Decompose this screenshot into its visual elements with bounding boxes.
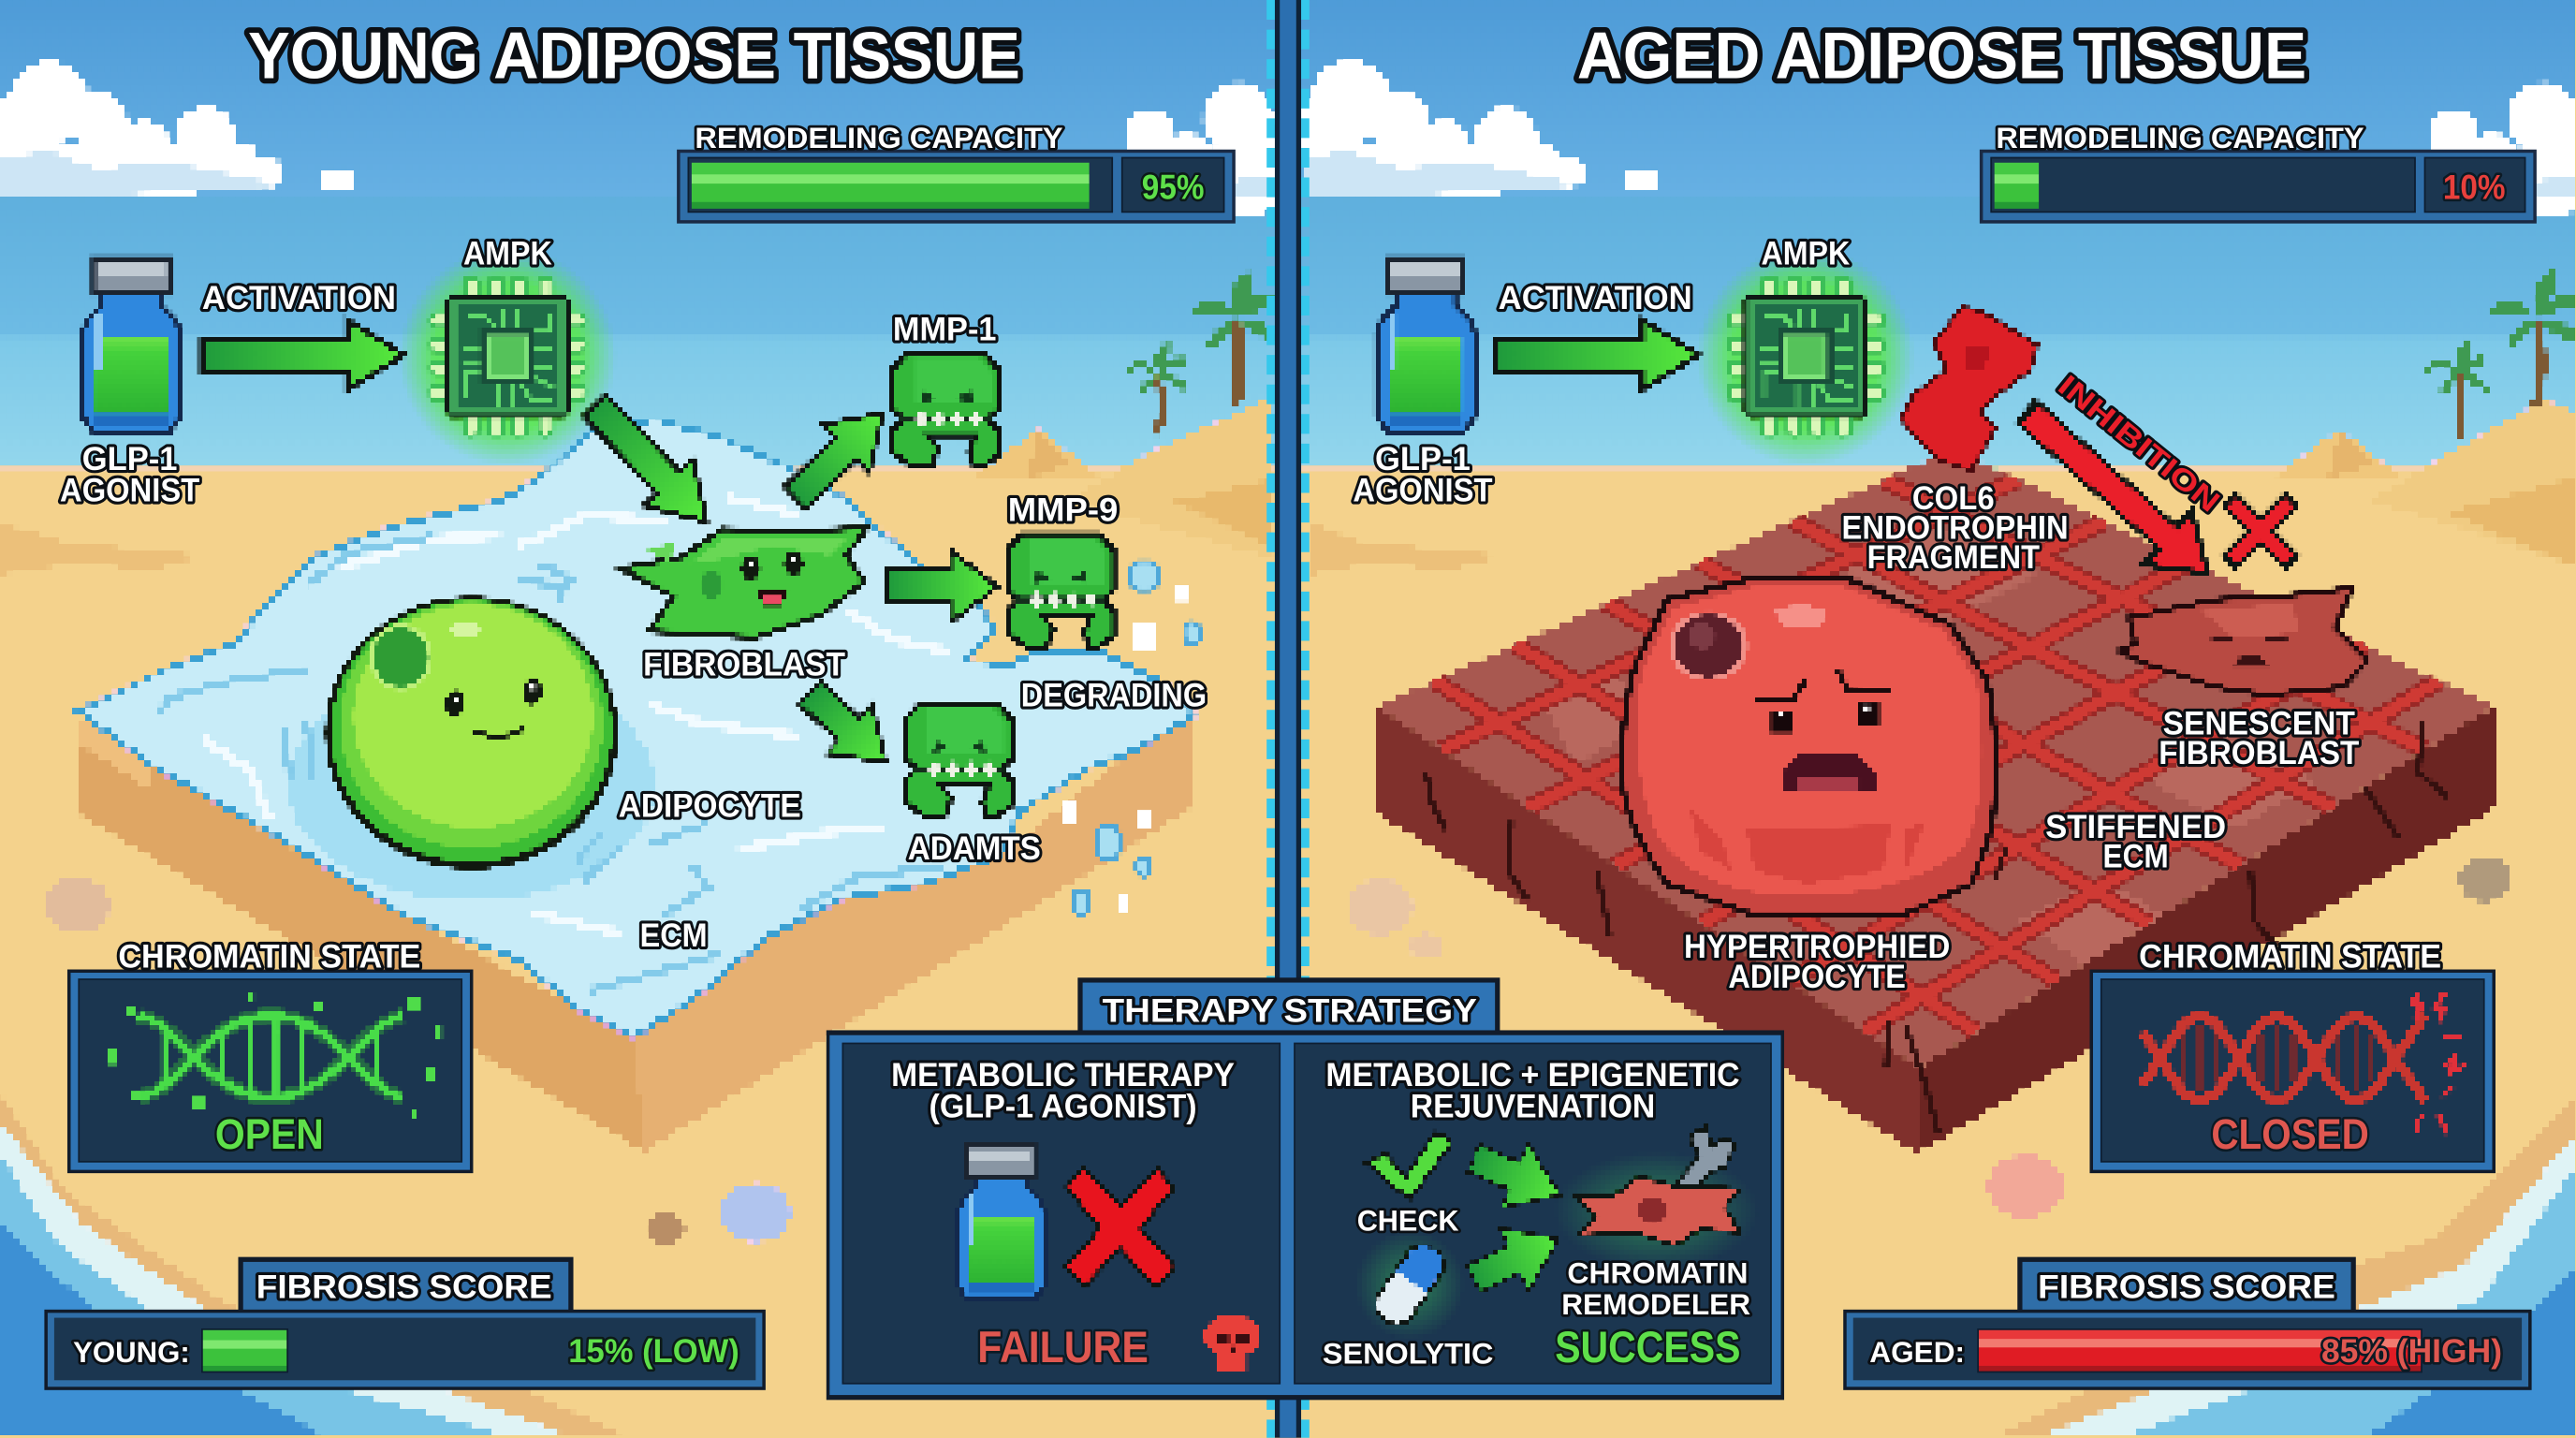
cell: hypertrophied adipocyte (1622, 577, 1996, 914)
label: ECM: ECM (640, 917, 708, 954)
cells, collagen grid, pathway icons and arrows (82, 248, 2448, 1134)
capacity label: REMODELING CAPACITY (695, 121, 1063, 154)
fibrosis tab: FIBROSIS SCORE (2038, 1269, 2335, 1306)
fibrosis label young: YOUNG: (73, 1335, 190, 1369)
label: COL6 endotrophin fragment (1841, 480, 2069, 576)
panel: fibrosis score aged (1843, 1257, 2532, 1390)
arrow: senolytic to remodeler (1459, 1208, 1573, 1310)
icon: check mark (1367, 1132, 1453, 1199)
icon: therapy vial (958, 1145, 1045, 1300)
heading: metabolic therapy: METABOLIC THERAPY (891, 1057, 1235, 1093)
capacity bar fill (1995, 163, 2039, 209)
heading: metabolic plus epigenetic (1325, 1057, 1740, 1124)
shoreline water, bottom right (1996, 1097, 2576, 1438)
icon: open DNA helix (109, 992, 442, 1121)
chromatin label: CHROMATIN STATE (118, 939, 420, 976)
label: senescent fibroblast (2159, 706, 2360, 771)
fibrosis label aged: AGED: (1869, 1335, 1965, 1369)
label: ADAMTS: ADAMTS (908, 830, 1041, 867)
panel: chromatin state open (67, 939, 473, 1173)
central divider (1271, 0, 1305, 1438)
heading: metabolic therapy: (GLP-1 AGONIST) (929, 1088, 1197, 1124)
label: COL6 endotrophin fragment: COL6 (1912, 480, 1995, 517)
fibrosis tab (238, 1257, 574, 1313)
fibrosis tab: FIBROSIS SCORE (256, 1269, 552, 1306)
collagen grid on stiffened ECM (1434, 479, 2439, 1032)
label: chromatin remodeler (1561, 1256, 1750, 1321)
therapy tab heading: THERAPY STRATEGY (1103, 993, 1477, 1030)
label: COL6 endotrophin fragment: ENDOTROPHIN (1841, 510, 2069, 547)
cell: senescent fibroblast (2119, 588, 2367, 695)
capacity value: 95% (1142, 168, 1204, 206)
shoreline water, bottom left (0, 1093, 633, 1438)
icon: senolytic pill (1334, 1210, 1486, 1360)
fibrosis value young: 15% (LOW) (568, 1333, 739, 1370)
panel: chromatin state closed (2089, 939, 2496, 1173)
heading: metabolic therapy (891, 1057, 1235, 1124)
status: success: SUCCESS (1555, 1323, 1741, 1372)
label: senescent fibroblast: SENESCENT (2163, 706, 2355, 742)
label: adipocyte: ADIPOCYTE (619, 787, 801, 824)
inhibition X mark (2224, 494, 2297, 567)
sea (0, 198, 2576, 470)
sky (0, 0, 2576, 198)
young ECM gel surface (79, 419, 1196, 1036)
label: COL6 endotrophin fragment: FRAGMENT (1867, 539, 2040, 576)
fibrosis bar aged (1978, 1329, 2422, 1372)
label: GLP-1 agonist aged (1353, 441, 1493, 508)
chromatin status: open: OPEN (215, 1110, 324, 1158)
label: GLP-1 agonist aged: AGONIST (1353, 472, 1493, 508)
label: hypertrophied adipocyte: HYPERTROPHIED (1684, 929, 1950, 965)
dunes and palms (0, 270, 2576, 575)
icon: chromatin remodeler cell (1554, 1127, 1758, 1270)
panel: remodeling capacity aged (1980, 121, 2537, 224)
label: hypertrophied adipocyte (1684, 929, 1950, 995)
COL6 endotrophin fragment (1901, 307, 2037, 470)
label: MMP-9: MMP-9 (1008, 492, 1118, 528)
chromatin label: CHROMATIN STATE (2139, 939, 2441, 976)
label: GLP-1 agonist young (60, 441, 200, 508)
icon: failure X (1066, 1168, 1175, 1286)
heading: metabolic plus epigenetic: REJUVENATION (1411, 1088, 1655, 1124)
shells and stones (44, 856, 2512, 1245)
label: GLP-1 agonist young: AGONIST (60, 472, 200, 508)
label: stiffened ECM: ECM (2103, 839, 2169, 875)
title: young: YOUNG ADIPOSE TISSUE (248, 18, 1020, 92)
label: stiffened ECM (2045, 809, 2226, 875)
ECM crumbling debris (1063, 562, 1199, 914)
label: senolytic: SENOLYTIC (1323, 1337, 1493, 1371)
cell: fibroblast, young (621, 527, 868, 638)
label: degrading: DEGRADING (1021, 678, 1207, 714)
stiffened ECM surface (1377, 448, 2494, 1068)
label: MMP-1: MMP-1 (893, 311, 996, 347)
fibrosis value aged: 85% (HIGH) (2321, 1333, 2502, 1370)
cell: adipocyte, young (326, 596, 618, 869)
aged tissue block sides (1377, 707, 2494, 1153)
label: senescent fibroblast: FIBROBLAST (2159, 735, 2360, 771)
fibrosis bar young (202, 1329, 287, 1372)
label: chromatin remodeler: CHROMATIN (1567, 1256, 1748, 1290)
capacity label: REMODELING CAPACITY (1996, 121, 2364, 154)
title: aged: AGED ADIPOSE TISSUE (1577, 18, 2306, 92)
icons: AMPK chips (399, 248, 1914, 465)
chromatin status: closed: CLOSED (2211, 1110, 2369, 1158)
icons: enzymes MMP-1, MMP-9, ADAMTS (892, 353, 1114, 816)
panel: fibrosis score young (44, 1257, 766, 1390)
label: AMPK aged: AMPK (1761, 236, 1851, 272)
label: GLP-1 agonist aged: GLP-1 (1375, 441, 1471, 477)
panel: therapy strategy (827, 977, 1784, 1400)
label: stiffened ECM: STIFFENED (2045, 809, 2226, 845)
label: hypertrophied adipocyte: ADIPOCYTE (1728, 959, 1906, 995)
label: chromatin remodeler: REMODELER (1561, 1287, 1750, 1321)
sand (0, 468, 2576, 1438)
inhibition arrow (2003, 386, 2232, 600)
icon: skull (1204, 1314, 1260, 1371)
aged block cracks (1426, 723, 2448, 1134)
icons: GLP-1 vials (82, 258, 1475, 433)
arrows: green pathway arrows (202, 320, 1699, 786)
label: activation aged: ACTIVATION (1499, 280, 1692, 316)
icon: closed DNA helix (2143, 992, 2467, 1134)
label: inhibition: INHIBITION (2052, 368, 2227, 519)
capacity bar fill (692, 163, 1090, 209)
panel: remodeling capacity young (677, 121, 1236, 224)
status: failure: FAILURE (977, 1323, 1149, 1372)
capacity value: 10% (2443, 168, 2506, 206)
label: GLP-1 agonist young: GLP-1 (82, 441, 178, 477)
fibrosis tab (2017, 1257, 2356, 1313)
arrow: check to remodeler (1460, 1127, 1573, 1226)
label: fibroblast: FIBROBLAST (643, 646, 846, 682)
therapy icons (958, 1127, 1758, 1371)
clouds (0, 61, 2576, 217)
label: check: CHECK (1357, 1204, 1459, 1238)
young tissue block sides (77, 716, 1194, 1152)
heading: metabolic plus epigenetic: METABOLIC + EPIGENETIC (1325, 1057, 1740, 1093)
label: AMPK young: AMPK (463, 236, 552, 272)
label: activation young: ACTIVATION (202, 280, 396, 316)
